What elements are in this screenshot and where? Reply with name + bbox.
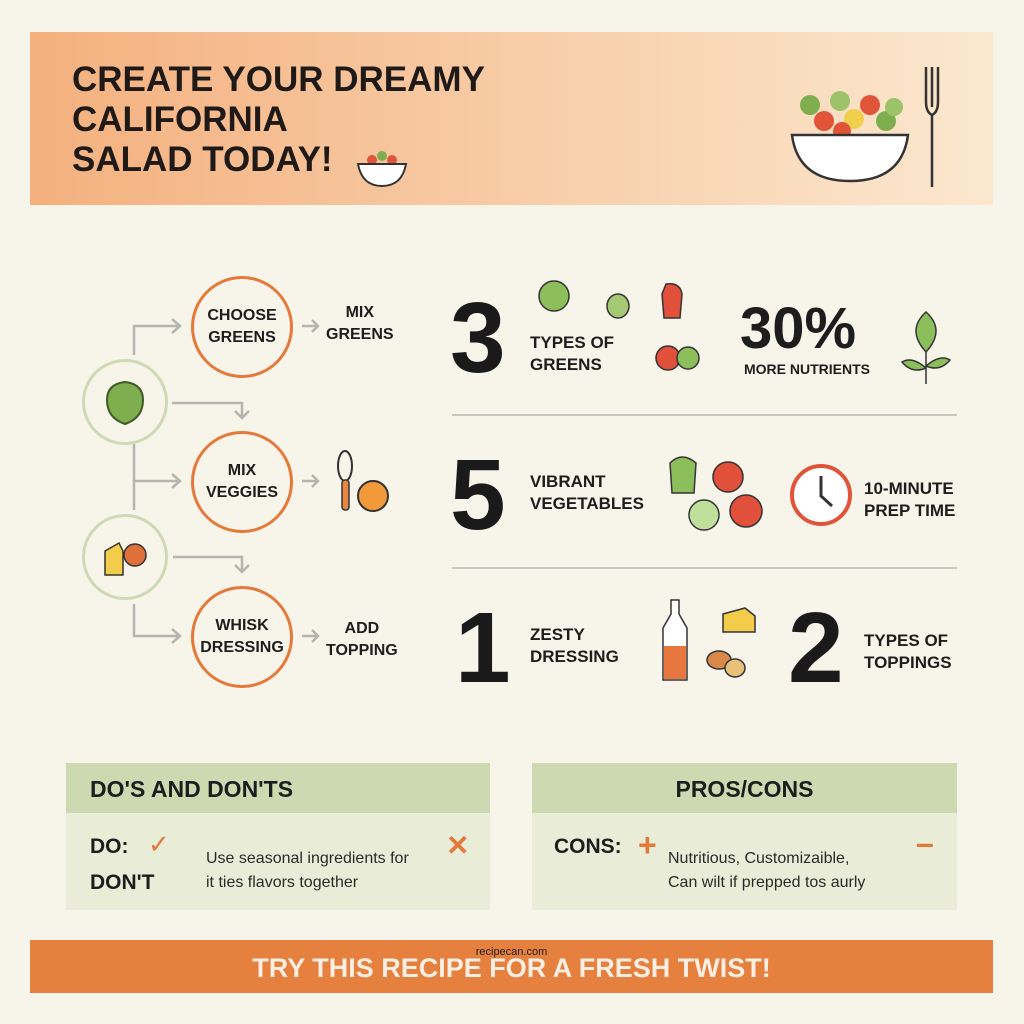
stat: 10-minute prep time: PREP TIME bbox=[864, 501, 955, 520]
stat: 1 zesty dressing: 1 bbox=[455, 592, 511, 704]
divider bbox=[452, 414, 957, 416]
text: do tip: it ties flavors together bbox=[206, 874, 358, 891]
panel: do's and don'ts: DO: bbox=[90, 835, 128, 858]
text: do tip: Use seasonal ingredients for bbox=[206, 850, 409, 867]
step: mix veggies: MIX bbox=[228, 462, 256, 479]
step: choose greens bbox=[191, 276, 293, 378]
stat: 2 types of toppings: TYPES OF bbox=[864, 631, 948, 650]
stat: 1 zesty dressing bbox=[455, 592, 756, 704]
label: add topping bbox=[326, 620, 398, 659]
label: mix greens: MIX bbox=[346, 304, 374, 321]
stat: 2 types of toppings: TOPPINGS bbox=[864, 653, 952, 672]
stat: 2 types of toppings bbox=[788, 592, 952, 704]
stat: 30% more nutrients: 30% bbox=[740, 296, 856, 361]
heading bbox=[532, 763, 957, 813]
panel: pros/cons: CONS: bbox=[554, 835, 622, 858]
panel: pros/cons: + bbox=[638, 827, 657, 863]
stat: 1 zesty dressing: ZESTY bbox=[530, 625, 585, 644]
green circle: lettuce bbox=[82, 359, 168, 445]
step: whisk dressing: DRESSING bbox=[200, 639, 284, 656]
heading bbox=[66, 763, 490, 813]
icon: small salad bowl bbox=[356, 151, 408, 187]
panel: do's and don'ts bbox=[66, 763, 490, 910]
heading: PROS/CONS bbox=[675, 776, 814, 802]
footer banner: recipecan.com bbox=[476, 946, 547, 958]
step: mix veggies: VEGGIES bbox=[206, 484, 278, 501]
icon: salad bowl and fork bbox=[790, 67, 940, 187]
step: mix veggies bbox=[191, 431, 293, 533]
stat: 2 types of toppings: 2 bbox=[788, 592, 844, 704]
footer banner bbox=[30, 940, 993, 993]
text: pros and cons: Nutritious, Customizaible, bbox=[668, 850, 849, 867]
stat: 3 types of greens: GREENS bbox=[530, 355, 602, 374]
stat: 30% more nutrients bbox=[740, 296, 952, 384]
title bbox=[72, 60, 485, 179]
stat: 10-minute prep time: 10-MINUTE bbox=[864, 479, 954, 498]
step: whisk dressing: WHISK bbox=[215, 617, 269, 634]
flowchart connectors bbox=[132, 318, 320, 644]
panel: do's and don'ts: ✓ bbox=[148, 829, 170, 859]
stat: 5 vibrant vegetables: 5 bbox=[450, 439, 506, 551]
label: mix greens: GREENS bbox=[326, 326, 394, 343]
icon: whisk and orange bbox=[337, 450, 389, 512]
footer banner: TRY THIS RECIPE FOR A FRESH TWIST! bbox=[252, 953, 771, 983]
panel: do's and don'ts: DON'T bbox=[90, 871, 154, 894]
stat: 5 vibrant vegetables: VIBRANT bbox=[530, 472, 606, 491]
label: mix greens bbox=[326, 304, 394, 343]
text: do tip bbox=[206, 850, 409, 891]
stat: 3 types of greens: 3 bbox=[450, 282, 506, 394]
text: pros and cons: Can wilt if prepped tos aurly bbox=[668, 874, 865, 891]
label: add topping: ADD bbox=[345, 620, 379, 637]
stat: 5 vibrant vegetables: VEGETABLES bbox=[530, 494, 644, 513]
stat: 30% more nutrients: MORE NUTRIENTS bbox=[744, 361, 870, 377]
title: SALAD TODAY! bbox=[72, 140, 333, 179]
panel: pros/cons bbox=[532, 763, 957, 910]
label: add topping: TOPPING bbox=[326, 642, 398, 659]
heading: DO'S AND DON'TS bbox=[90, 776, 293, 802]
step: choose greens: GREENS bbox=[208, 329, 276, 346]
title: CREATE YOUR DREAMY bbox=[72, 60, 485, 99]
panel: pros/cons: – bbox=[916, 825, 934, 861]
step: choose greens: CHOOSE bbox=[207, 307, 277, 324]
panel: do's and don'ts: ✕ bbox=[446, 830, 469, 861]
text: pros and cons bbox=[668, 850, 866, 891]
stat: 5 vibrant vegetables bbox=[450, 439, 763, 551]
stat: 10-minute prep time bbox=[790, 464, 955, 526]
stat: 1 zesty dressing: DRESSING bbox=[530, 647, 619, 666]
header banner bbox=[30, 32, 993, 205]
stat: 3 types of greens bbox=[450, 280, 700, 394]
title: CALIFORNIA bbox=[72, 100, 288, 139]
step: whisk dressing bbox=[191, 586, 293, 688]
divider bbox=[452, 567, 957, 569]
stat: 3 types of greens: TYPES OF bbox=[530, 333, 614, 352]
green circle: cheese and cookie bbox=[82, 514, 168, 600]
